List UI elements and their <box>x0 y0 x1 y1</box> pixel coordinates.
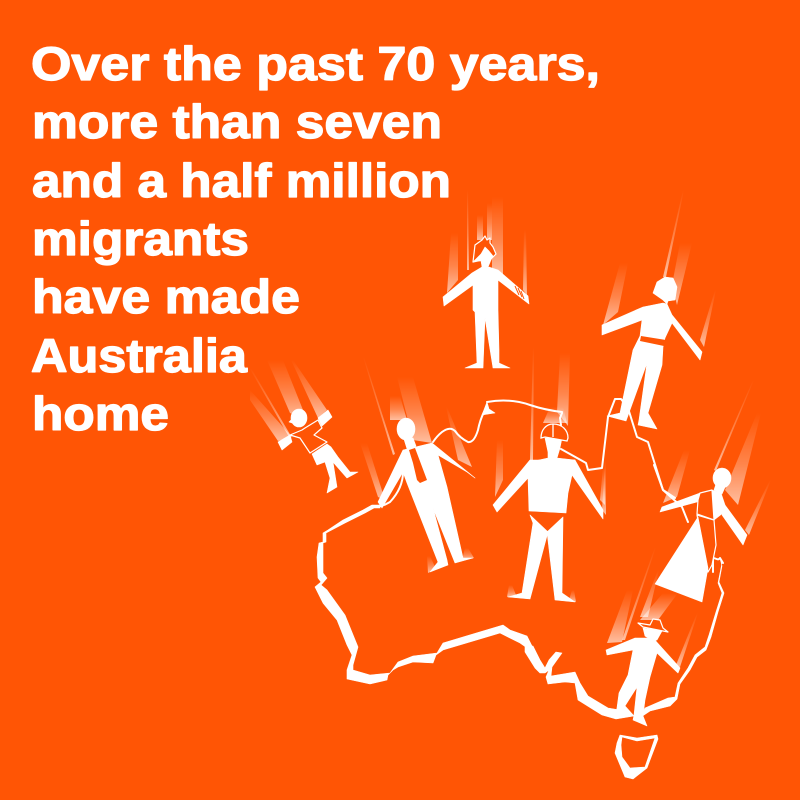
body <box>378 443 475 572</box>
head <box>397 418 415 440</box>
wristband <box>515 286 524 299</box>
face <box>643 628 662 641</box>
cap brim <box>289 416 298 425</box>
south-east wedge and east coast <box>641 558 724 717</box>
shorts and legs <box>312 444 358 493</box>
title: home <box>32 387 169 440</box>
light beams <box>250 190 771 667</box>
title: more than seven <box>32 95 442 148</box>
queensland coast <box>654 465 688 522</box>
western and southern coast <box>315 505 533 684</box>
head <box>530 438 575 462</box>
neck <box>714 484 726 494</box>
head <box>653 277 677 304</box>
south-eastern coast <box>525 646 634 719</box>
neck <box>403 436 416 452</box>
head <box>713 468 731 488</box>
head <box>291 409 307 427</box>
title: have made <box>32 270 300 323</box>
figure: man in hat <box>603 619 680 726</box>
figure: man in swimwear <box>493 424 603 602</box>
belt <box>640 336 666 346</box>
cap <box>541 424 568 441</box>
arms <box>278 435 292 450</box>
title: migrants <box>32 212 249 265</box>
arms <box>660 493 700 512</box>
figure: child <box>278 409 358 493</box>
cape bulb <box>482 402 495 415</box>
eastern coast bulge <box>713 558 723 572</box>
title: Australia <box>31 329 248 382</box>
body <box>602 303 702 429</box>
bodice <box>712 490 725 520</box>
figure: woman in dress <box>655 468 747 602</box>
title: Over the past 70 years, <box>31 37 600 90</box>
title: and a half million <box>32 154 451 207</box>
figure: woman with belt <box>602 277 702 429</box>
face <box>474 247 493 267</box>
map of Australia <box>315 399 724 779</box>
body <box>443 267 529 368</box>
hat <box>638 619 668 632</box>
legs <box>547 517 575 602</box>
torso and arms <box>493 460 603 519</box>
body <box>603 638 680 726</box>
north coast line <box>561 399 675 498</box>
skirt <box>697 515 716 572</box>
gulf line and cape york <box>433 401 562 442</box>
figure: man with spiky hair <box>443 236 529 368</box>
figure: man in tie <box>378 418 475 572</box>
shirt <box>290 420 327 453</box>
northern line <box>373 472 403 507</box>
tasmania <box>615 735 658 779</box>
title <box>31 37 600 440</box>
hair <box>473 236 496 262</box>
tie <box>409 448 427 483</box>
